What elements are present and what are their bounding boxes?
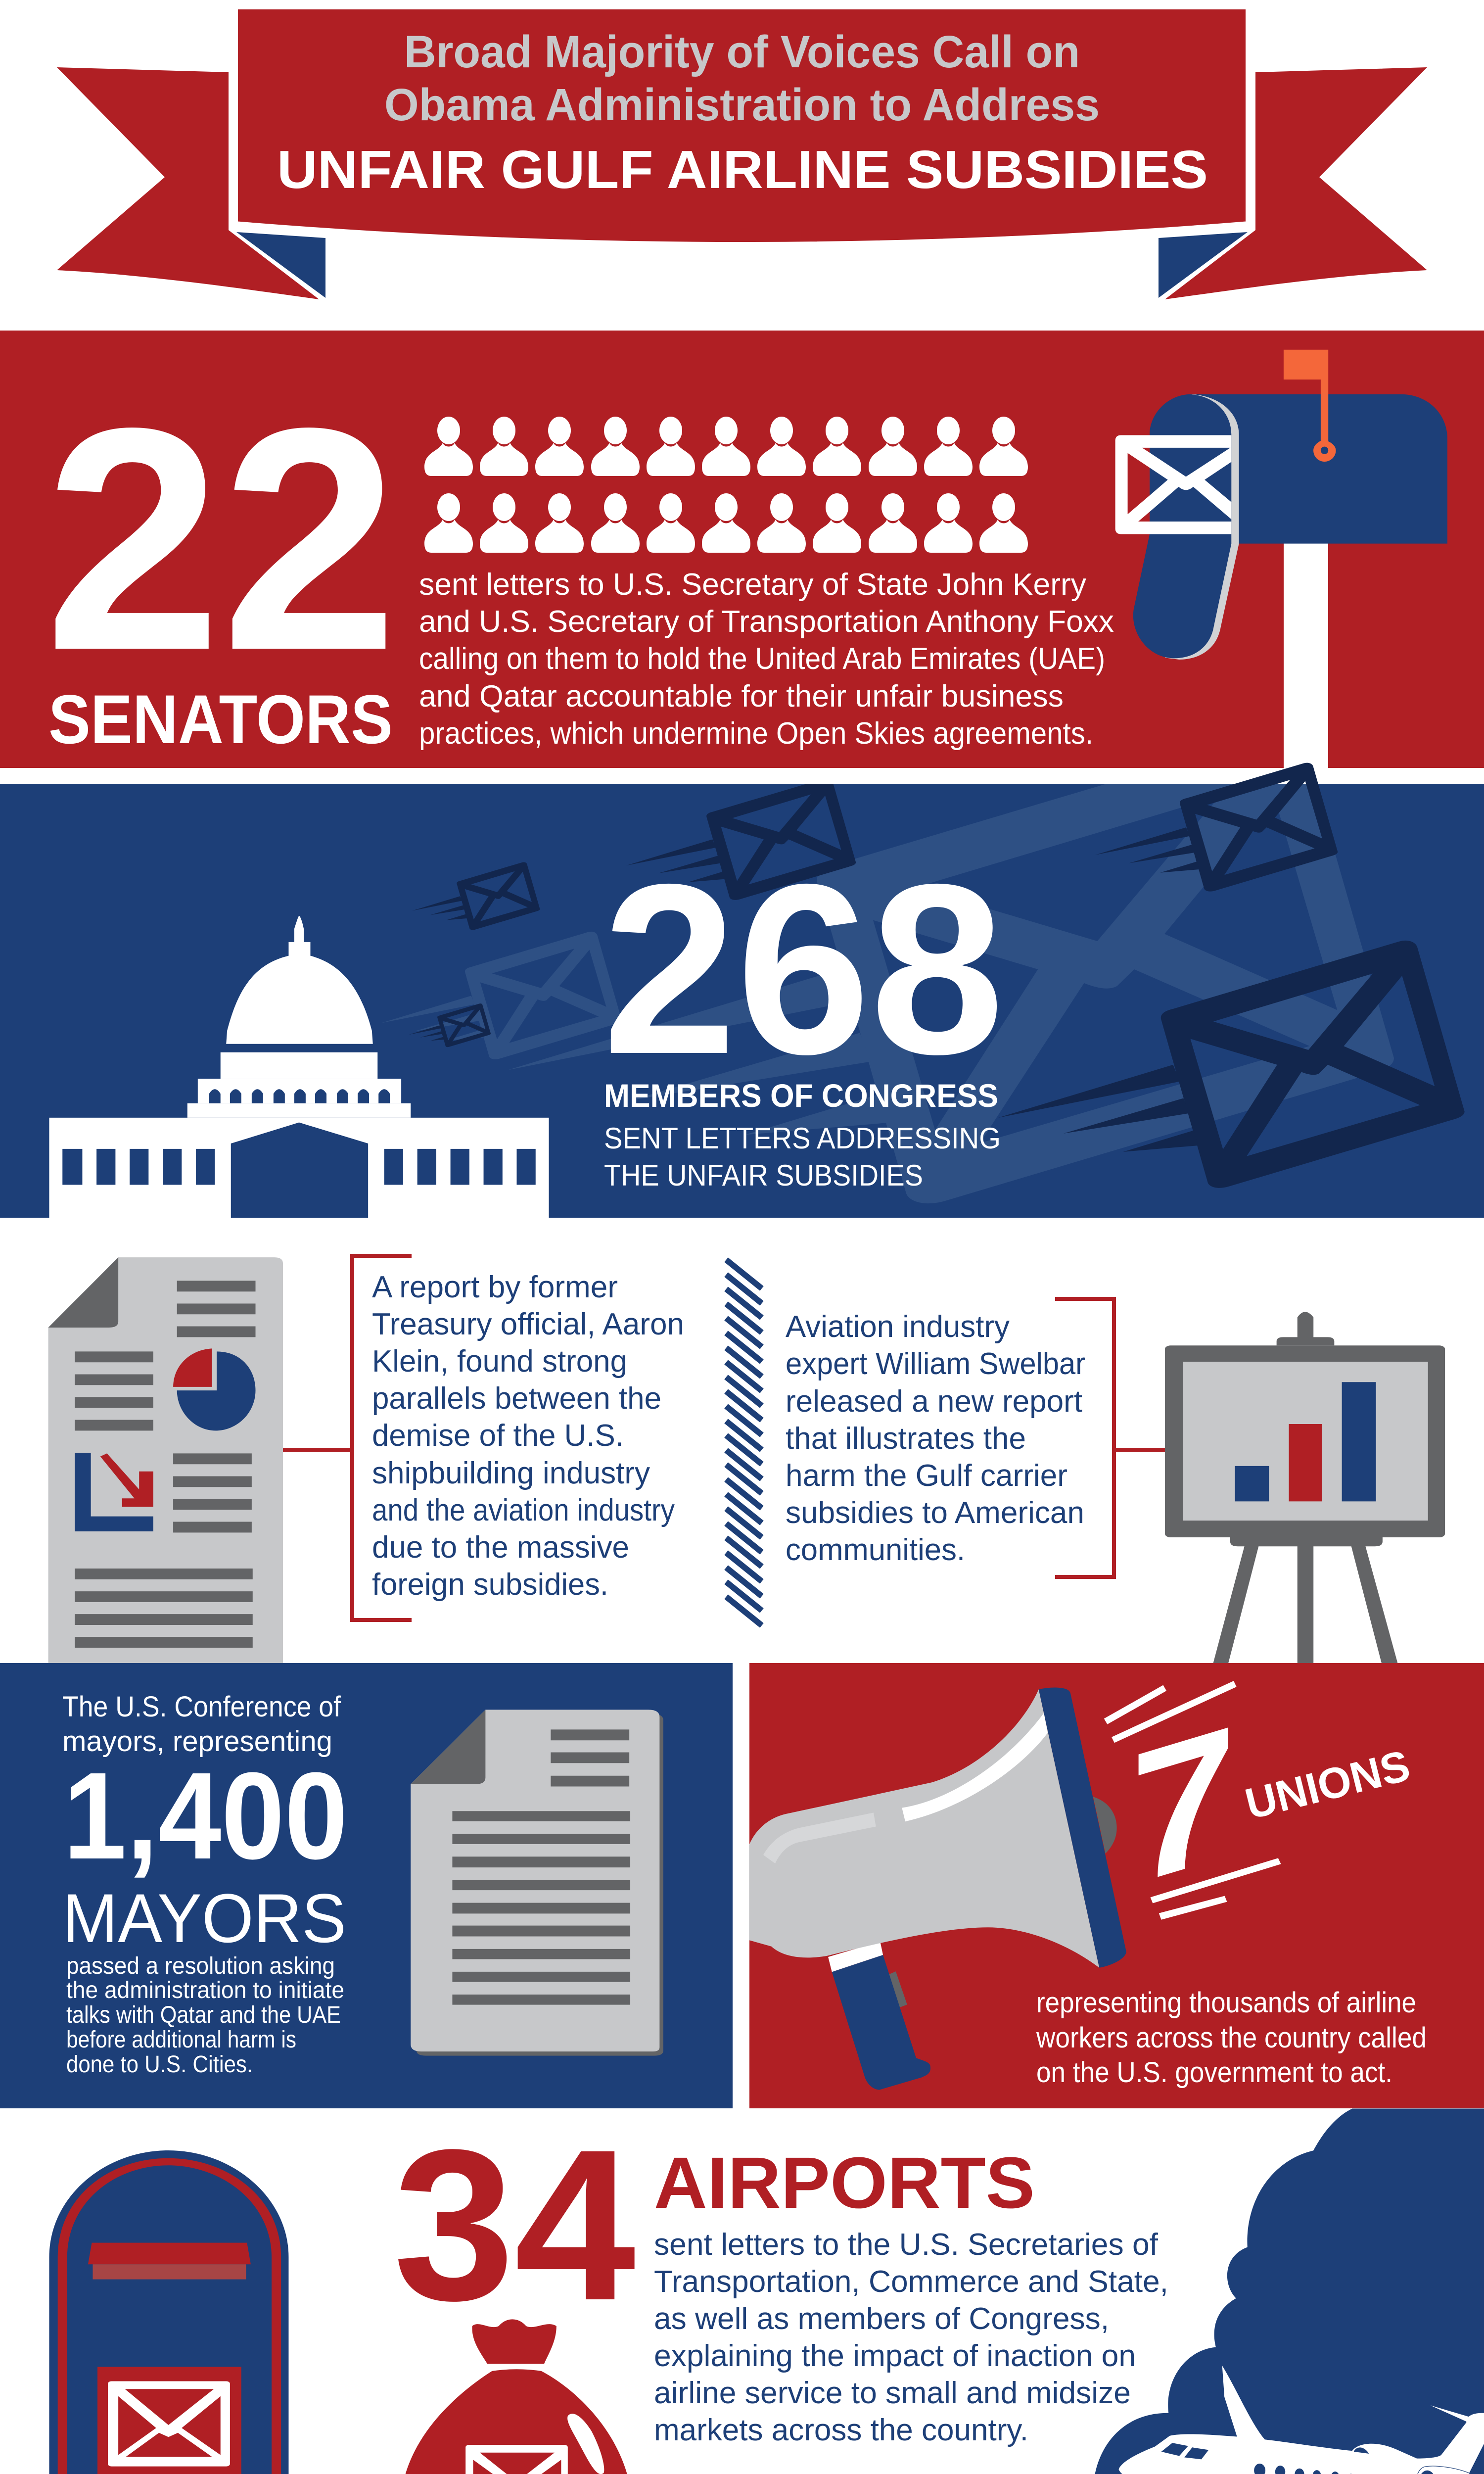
- airports text: markets across the country.: [654, 2413, 1028, 2447]
- icon: document: [411, 1710, 663, 2056]
- panel: senators: [0, 331, 1484, 768]
- mayors body text: passed a resolution asking: [66, 1953, 335, 1979]
- report text: Treasury official, Aaron: [372, 1307, 684, 1341]
- panel: airports: [49, 2105, 1484, 2474]
- swelbar text: [786, 1310, 1085, 1567]
- title: Broad Majority of Voices Call on: [404, 27, 1080, 77]
- mayors intro text: [62, 1691, 341, 1758]
- panel: unions: [749, 1663, 1484, 2108]
- mayors body text: the administration to initiate: [66, 1977, 344, 2003]
- number 268: 268: [603, 833, 1004, 1104]
- icon: mailbox: [1115, 350, 1447, 768]
- report text: foreign subsidies.: [372, 1568, 608, 1602]
- letters text: SENT LETTERS ADDRESSING: [604, 1122, 1001, 1155]
- senators text: practices, which undermine Open Skies agreements.: [419, 716, 1093, 751]
- swelbar text: released a new report: [786, 1384, 1082, 1419]
- senators text: sent letters to U.S. Secretary of State John Kerry: [419, 568, 1086, 602]
- number 1,400: 1,400: [63, 1747, 348, 1885]
- title: [277, 27, 1208, 200]
- members of congress label: MEMBERS OF CONGRESS: [604, 1077, 998, 1114]
- icon: capitol building: [49, 916, 549, 1218]
- swelbar text: Aviation industry: [786, 1310, 1010, 1344]
- letters text: THE UNFAIR SUBSIDIES: [604, 1159, 923, 1192]
- senators text: and U.S. Secretary of Transportation Anthony Foxx: [419, 605, 1114, 639]
- mayors intro text: mayors, representing: [62, 1725, 332, 1758]
- number 34: 34: [393, 2105, 637, 2345]
- airports label: AIRPORTS: [654, 2142, 1035, 2224]
- icon: cloud and plane: [1052, 2108, 1484, 2474]
- icon: blue mailbox: [49, 2150, 288, 2474]
- speed lines: [1104, 1681, 1281, 1920]
- number 22: 22: [45, 362, 398, 716]
- airports text: airline service to small and midsize: [654, 2376, 1131, 2410]
- mayors intro text: The U.S. Conference of: [62, 1691, 341, 1723]
- left bracket: [283, 1256, 412, 1620]
- unions text: workers across the country called: [1036, 2022, 1427, 2054]
- senators text: and Qatar accountable for their unfair business: [419, 679, 1064, 714]
- airports text: sent letters to the U.S. Secretaries of: [654, 2228, 1159, 2262]
- airports text: [654, 2228, 1168, 2447]
- swelbar text: harm the Gulf carrier: [786, 1459, 1067, 1493]
- icon: flying envelopes: [381, 733, 1465, 1203]
- report text: and the aviation industry: [372, 1493, 675, 1527]
- panel: reports: [48, 1256, 1445, 1663]
- letters text: [604, 1122, 1001, 1192]
- unions text: on the U.S. government to act.: [1036, 2056, 1392, 2089]
- report text: [372, 1270, 684, 1602]
- report text: shipbuilding industry: [372, 1456, 650, 1490]
- icon: megaphone: [749, 1688, 1126, 2090]
- mayors body text: [66, 1953, 344, 2078]
- report text: demise of the U.S.: [372, 1419, 624, 1453]
- airports text: explaining the impact of inaction on: [654, 2339, 1136, 2373]
- mayors label: MAYORS: [62, 1879, 346, 1957]
- unions label: UNIONS: [1241, 1741, 1415, 1828]
- mayors body text: done to U.S. Cities.: [66, 2051, 253, 2078]
- report text: A report by former: [372, 1270, 618, 1304]
- senators label: SENATORS: [48, 680, 393, 758]
- title: UNFAIR GULF AIRLINE SUBSIDIES: [277, 140, 1208, 200]
- number 7: 7: [1130, 1684, 1237, 1925]
- unions text: representing thousands of airline: [1036, 1987, 1416, 2019]
- swelbar text: subsidies to American: [786, 1496, 1084, 1530]
- icon: easel chart: [1165, 1312, 1445, 1663]
- senators text: [419, 568, 1114, 751]
- right bracket: [1055, 1299, 1165, 1577]
- report text: due to the massive: [372, 1530, 629, 1565]
- mayors body text: before additional harm is: [66, 2027, 296, 2053]
- swelbar text: that illustrates the: [786, 1422, 1026, 1456]
- mayors body text: talks with Qatar and the UAE: [66, 2002, 341, 2028]
- banner ribbon: [57, 6, 1427, 299]
- icon: rows of people: [424, 417, 1028, 553]
- senators text: calling on them to hold the United Arab Emirates (UAE): [419, 642, 1105, 676]
- icon: report document: [48, 1257, 283, 1663]
- unions text: [1036, 1987, 1427, 2089]
- icon: mail sack: [400, 2319, 632, 2474]
- airports text: as well as members of Congress,: [654, 2302, 1109, 2336]
- swelbar text: expert William Swelbar: [786, 1347, 1085, 1381]
- panel: members of congress: [0, 733, 1484, 1218]
- title: Obama Administration to Address: [384, 80, 1100, 130]
- panel: mayors: [0, 1663, 733, 2108]
- airports text: Transportation, Commerce and State,: [654, 2265, 1168, 2299]
- report text: Klein, found strong: [372, 1344, 627, 1379]
- swelbar text: communities.: [786, 1533, 965, 1567]
- report text: parallels between the: [372, 1381, 661, 1416]
